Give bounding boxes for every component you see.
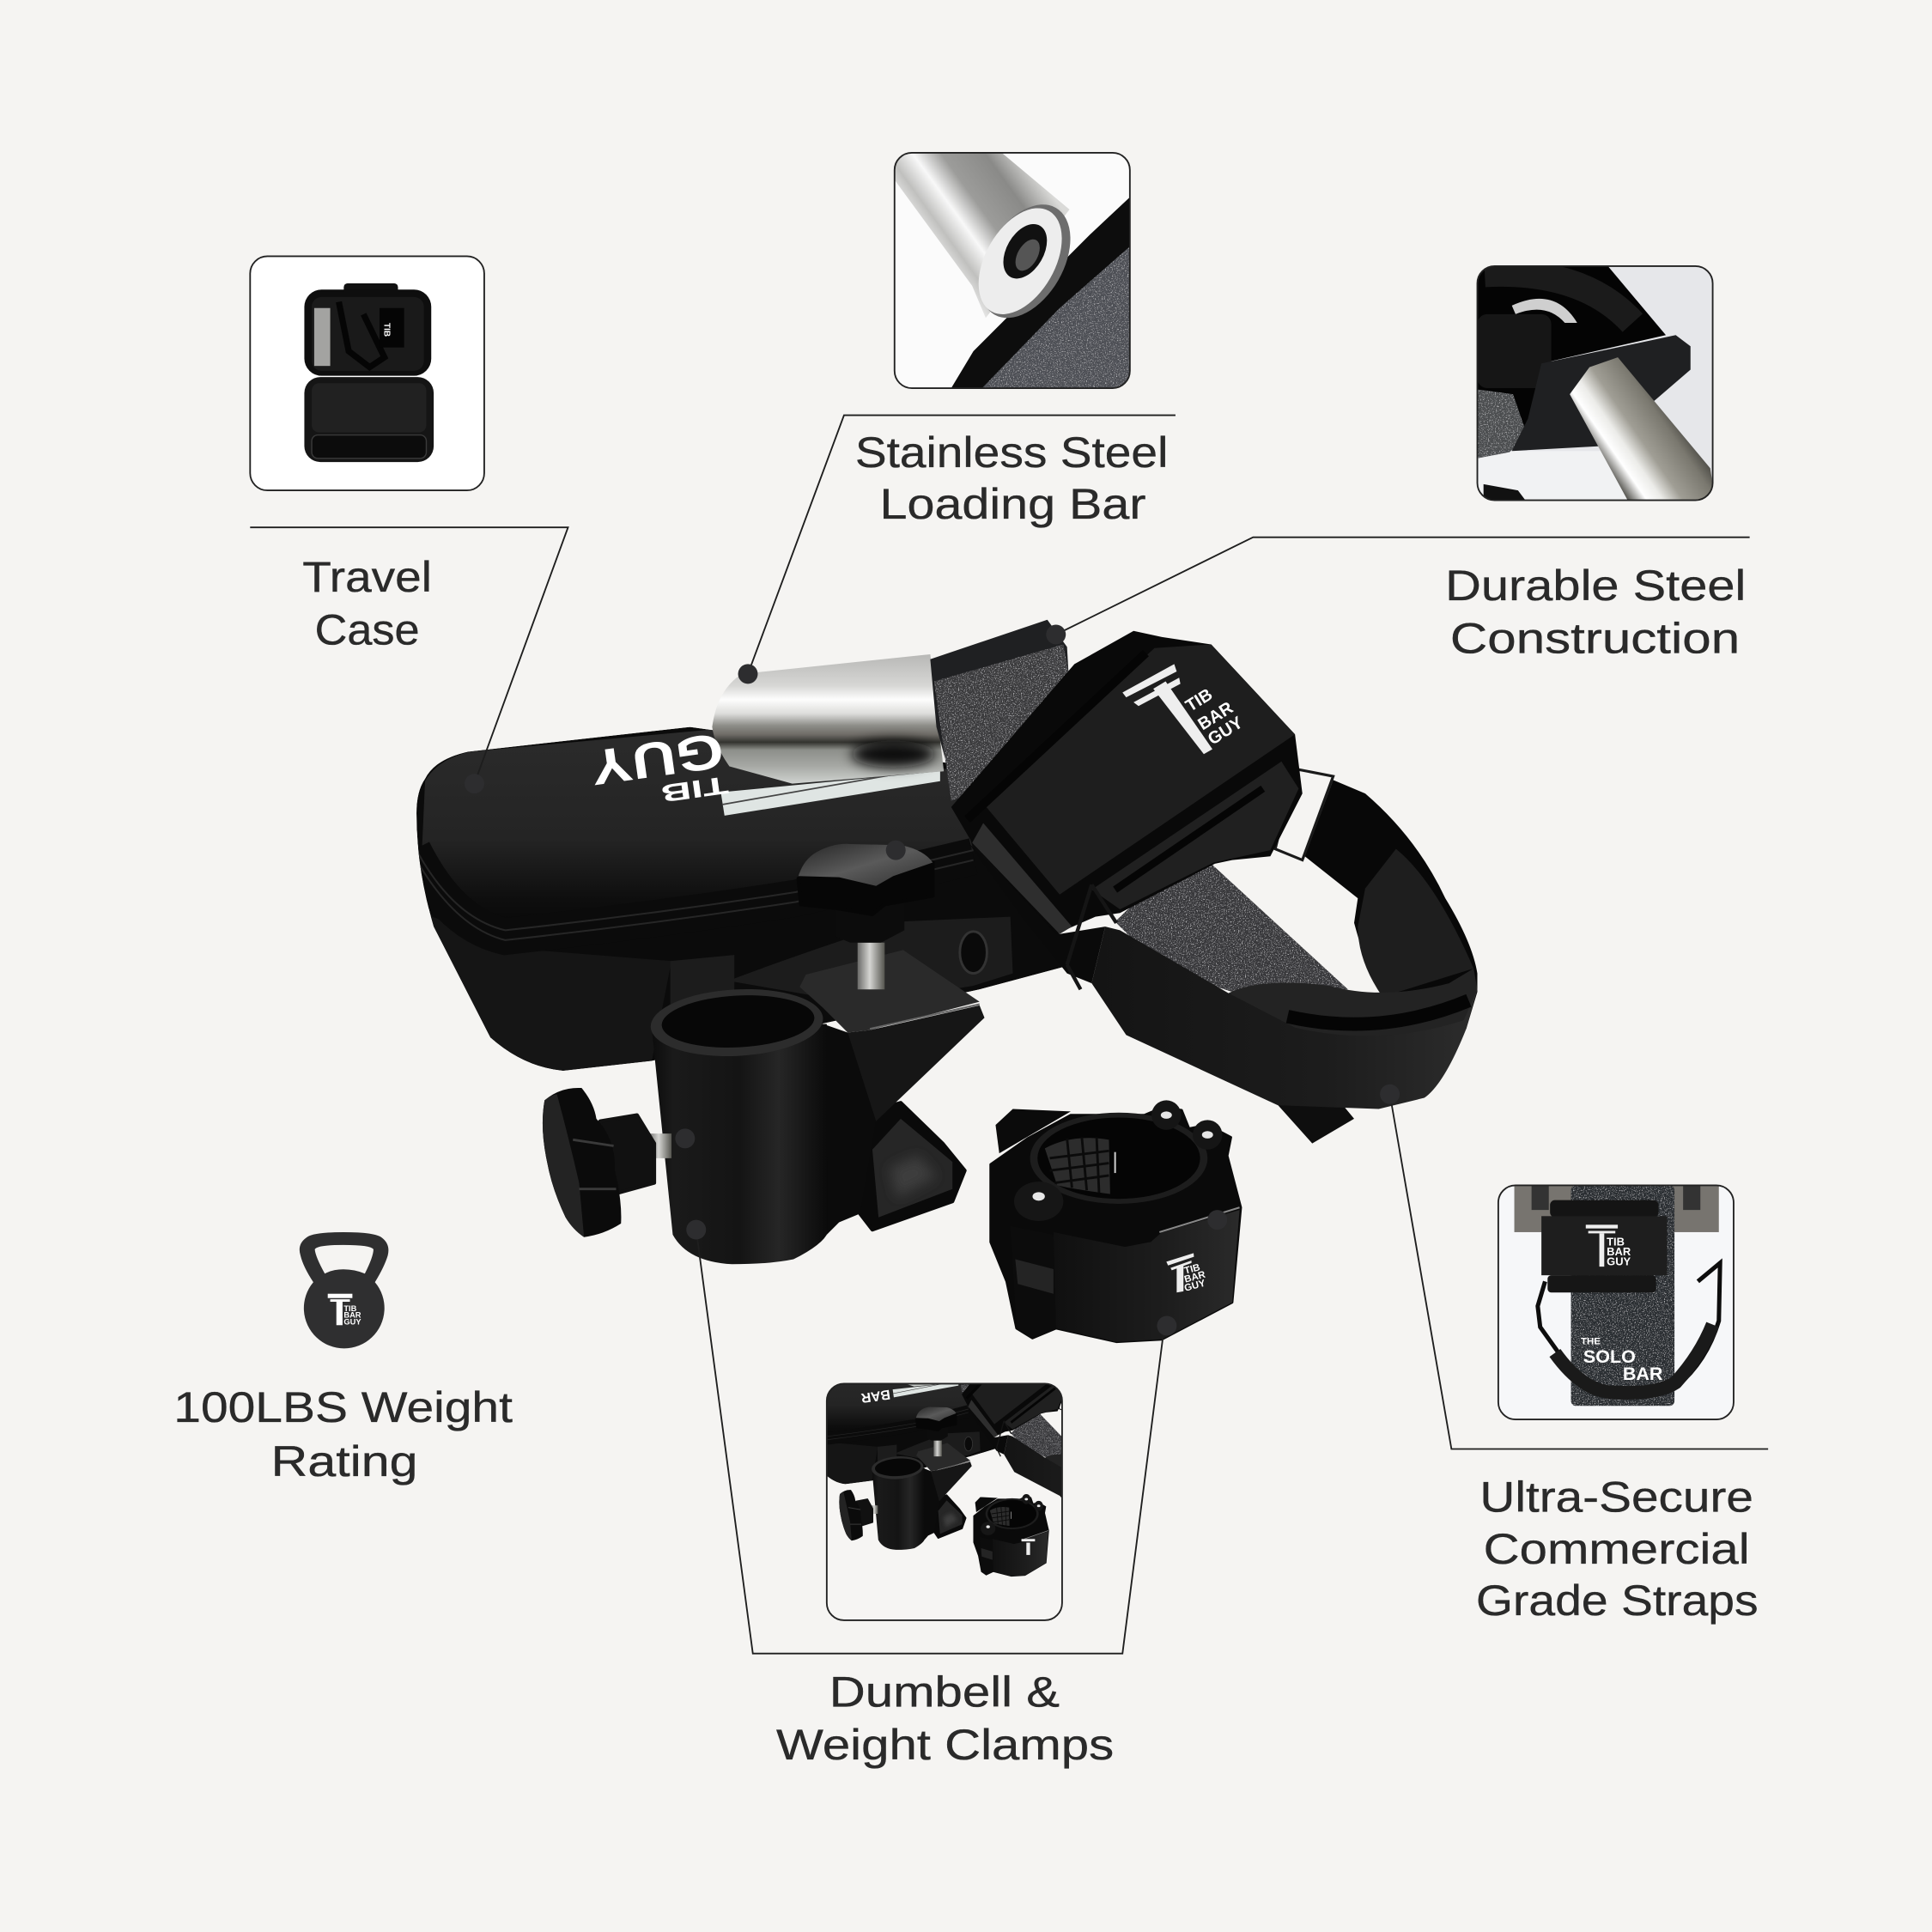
- collar logo: [1166, 1253, 1207, 1294]
- strap logo: BAR: [1195, 698, 1236, 734]
- thumbnail frame: dumbbell and weight clamps: [827, 1383, 1062, 1620]
- leader line: durable steel: [1056, 538, 1750, 635]
- product photo: kit assembly: [413, 620, 1478, 1342]
- label: dumbell and weight clamps: Dumbell &: [829, 1668, 1060, 1716]
- thumbnail frame: travel case: [250, 256, 484, 490]
- label: weight rating: 100LBS Weight: [173, 1383, 513, 1431]
- icon: kettlebell: GUY: [343, 1318, 361, 1327]
- thumbnail: ultra-secure straps: TIB: [1607, 1236, 1625, 1249]
- case logo: [587, 722, 730, 807]
- thumbnail frame: stainless steel bar: [895, 153, 1130, 388]
- label: dumbell and weight clamps: Weight Clamps: [776, 1721, 1114, 1769]
- collar logo: BAR: [1183, 1269, 1207, 1285]
- ankle strap and padded loop: [951, 631, 1478, 1109]
- icon: kettlebell: TIB: [343, 1304, 357, 1313]
- tube clamp with knobs: [543, 844, 985, 1264]
- thumbnail: travel case: [250, 256, 484, 490]
- label: weight rating: Rating: [271, 1437, 417, 1485]
- barbell collar clamp: [991, 1100, 1241, 1342]
- leader line: travel case: [250, 527, 568, 784]
- label: travel case: Travel: [302, 553, 432, 601]
- thumbnail: ultra-secure straps: BAR: [1623, 1364, 1663, 1384]
- thumbnail: ultra-secure straps: [1515, 1186, 1722, 1406]
- thumbnail frame: ultra-secure straps: [1498, 1185, 1734, 1419]
- icon: kettlebell: [300, 1232, 388, 1348]
- label: durable steel construction: Construction: [1450, 615, 1740, 663]
- collar logo: TIB: [1183, 1262, 1201, 1277]
- thumbnail: ultra-secure straps: BAR: [1607, 1245, 1631, 1258]
- leader line: straps: [1390, 1094, 1768, 1449]
- thumbnail frame: durable steel construction: [1478, 266, 1713, 501]
- travel case: [413, 727, 1067, 1071]
- collar logo: GUY: [1183, 1279, 1207, 1294]
- label: durable steel construction: Durable Steel: [1445, 562, 1746, 610]
- label: stainless steel loading bar: Stainless Steel: [855, 428, 1168, 477]
- thumbnail: ultra-secure straps: GUY: [1607, 1255, 1631, 1268]
- strap logo: TIB: [1182, 685, 1216, 716]
- leader line: clamps: [696, 1230, 1164, 1654]
- steel footplate with grip tape: [930, 620, 1354, 1144]
- thumbnail: ultra-secure straps: SOLO: [1583, 1346, 1636, 1367]
- thumbnail: dumbbell and weight clamps: [828, 1384, 1061, 1577]
- thumbnail: travel case: TIB: [382, 323, 392, 337]
- label: stainless steel loading bar: Loading Bar: [880, 480, 1146, 528]
- thumbnail: dumbbell and weight clamps: BAR: [860, 1387, 891, 1405]
- strap logo: [1122, 664, 1247, 754]
- strap logo: GUY: [1205, 713, 1247, 749]
- label: ultra-secure straps: Grade Straps: [1476, 1577, 1759, 1625]
- label: travel case: Case: [315, 605, 420, 653]
- case logo: TIB: [659, 770, 730, 807]
- icon: kettlebell: BAR: [343, 1311, 361, 1320]
- label: ultra-secure straps: Commercial: [1484, 1525, 1750, 1573]
- thumbnail: durable steel construction: [1478, 266, 1715, 501]
- thumbnail: ultra-secure straps: THE: [1581, 1337, 1601, 1347]
- leader line: stainless steel bar: [748, 416, 1176, 674]
- stainless steel loading bar: [712, 654, 944, 784]
- case logo: GUY: [587, 722, 727, 795]
- callout dots: [465, 625, 1400, 1335]
- thumbnail: stainless steel bar: [895, 153, 1130, 388]
- label: ultra-secure straps: Ultra-Secure: [1479, 1473, 1753, 1522]
